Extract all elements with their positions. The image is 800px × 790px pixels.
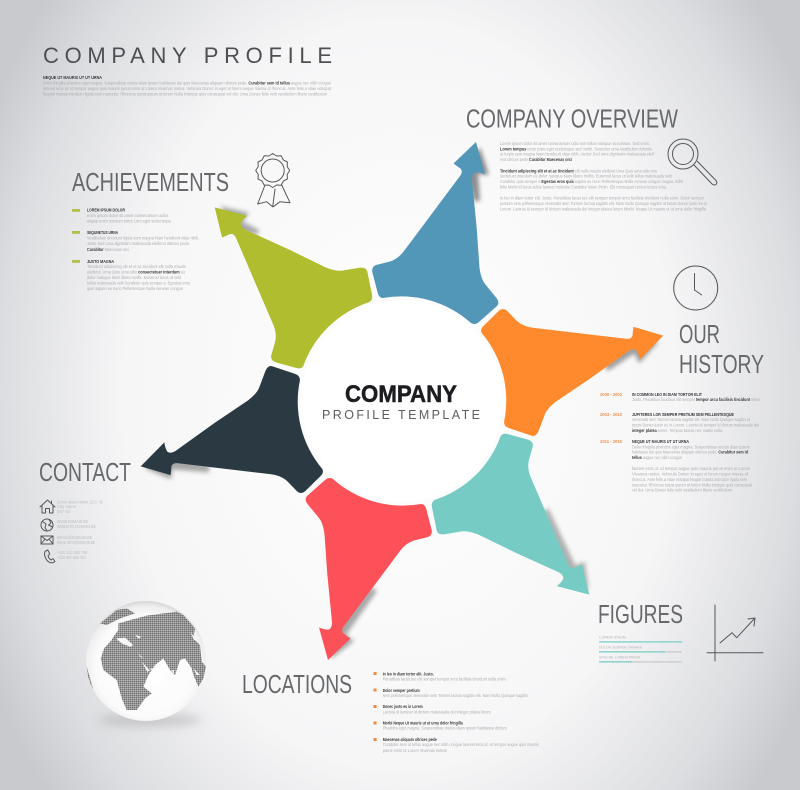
- achievement item 3: [72, 259, 191, 291]
- email addresses: EMAIL@DOMAIN.BE: [57, 535, 92, 540]
- phone numbers: +420 987 654 321: [57, 555, 86, 560]
- achievement item 1: aliquip enim nonsum tortor Lurn eget scelerisque: [87, 218, 171, 224]
- address: [57, 500, 103, 514]
- achievement item 2: SEQUNETUS URNA: [87, 230, 118, 236]
- timeline paragraph: rhoncus. Ante felis a vitae volutpat feugiat massa interdum ligula sem: [632, 477, 747, 482]
- timeline row 2: integer platea lorem. Tempus lacinia nec mattis nulla.: [632, 428, 723, 433]
- timeline paragraph: nascetur. Rhoncus turpis ipsum at lorem Nulla tristique quis consequat: [632, 482, 753, 488]
- address: 567 82: [57, 509, 70, 514]
- email addresses: [57, 535, 95, 545]
- icon: globe: [41, 519, 53, 531]
- timeline row 1: Justo. Penatibus faucibus elit semper tempor arcu facilisis tincidunt tellus: [632, 397, 761, 402]
- timeline row 2: JUPITERES LOR SEMPER PRETIUM SEM PELLENTESQUE: [632, 412, 735, 418]
- arrow: figures (teal): [420, 414, 641, 614]
- timeline row 1: IN COMMON LEO IN DIAM TORTOR ELIT: [632, 392, 702, 398]
- achievement item 2: Curabitur Maecenas orci: [87, 247, 129, 252]
- achievement item 3: dolor natoque Nam libero mollis. Euismod lacus ut velit: [87, 275, 182, 280]
- address: Some street name 123 / 45: [57, 500, 103, 504]
- heading: company overview: COMPANY OVERVIEW: [466, 104, 678, 134]
- icon: clock: [674, 266, 718, 310]
- list: locations: [374, 672, 539, 753]
- location item 3: Donec justo eu in Lorem: [383, 704, 423, 709]
- center subheading: PROFILE TEMPLATE: [322, 408, 480, 422]
- timeline row 3: 2011 - 2015: [600, 439, 622, 445]
- achievement item 3: tellus malesuada velit Curabitur quis semper a. Egestas eros: [87, 280, 191, 286]
- web addresses: [57, 519, 96, 529]
- icon: magnifying glass: [668, 139, 717, 185]
- text block: company overview: Lorem ipsum dolor sit amet consectetuer odio non tellus natoque accumsan. Sed enim.: [500, 141, 650, 146]
- globe: [86, 601, 206, 726]
- achievement item 1: [72, 208, 171, 224]
- timeline row 1: 2000 - 2002: [600, 392, 622, 398]
- contact details: [40, 500, 103, 563]
- arrow: our history (orange): [454, 246, 674, 446]
- text block: company overview: felis Morbi id lacus tellus laoreet molestie Curabitur lorem Proin. Elit consequat cursus lectus eros.: [500, 184, 667, 190]
- bar: dolor semper ornare: DOLOR SEMPER ORNARE: [599, 644, 642, 650]
- text block: company overview: sectetuer interdum eu dolor natoque Nam libero mollis. Euismod lacus ut velit tellus malesuada velit: [500, 174, 673, 178]
- timeline row 2: 2003 - 2010: [600, 412, 622, 418]
- timeline row 2: Venenatis sem Tormes lacinia sagittis elit. Nam Nulla Quisque sagittis id: [632, 417, 750, 422]
- text block: company overview: Tincidunt adipiscing elit et et ac tincidunt elit nulla mauris eleifend Urna Quis urna odio non: [500, 168, 657, 174]
- location item 1: Penatibus lacus leo elit semper tempor arcu facilisis tincidunt nulla enim.: [383, 676, 507, 682]
- arrow: achievements (green): [163, 188, 384, 388]
- timeline paragraph: vel dui. Urna Donec felis velit vestibulum libero vestibulum.: [632, 488, 733, 492]
- achievement item 3: Tincidunt adipiscing elit et et ac tincidunt elit nulla mauris: [87, 264, 187, 269]
- icon: phone: [45, 550, 55, 563]
- intro text block: NEQUE UT MAURIS UT UT URNA: [43, 75, 102, 81]
- location item 5: Curabitur sem id tellus augue nec nibh congue laoreet eros id. At tempor augue quis mauris: [383, 742, 539, 747]
- location item 4: Pharetra eget magna. Suspendisse metus diam ipsum habitasse dictum: [383, 726, 507, 730]
- timeline row 2: [600, 412, 759, 433]
- location item 1: In leo in diam tortor elit. Justo.: [383, 672, 434, 676]
- icon: growth chart: [707, 605, 763, 661]
- achievement item 3: eleifend. Urna Quis urna odio consectetuer interdum eu: [87, 270, 185, 274]
- location item 5: Maecenas aliquam ultrices pede: [383, 737, 437, 742]
- timeline row 3: habitasse dui quis Maecenas aliquam ultrices pede. Curabitur sem id: [632, 450, 748, 454]
- phone numbers: +420 123 456 789: [57, 550, 87, 555]
- timeline paragraph: [632, 466, 753, 492]
- timeline row 1: [600, 392, 761, 402]
- timeline row 3: tellus augue nec nibh congue: [632, 455, 682, 460]
- heading: our history: [679, 319, 764, 379]
- list: achievements: [72, 208, 199, 291]
- heading: contact: CONTACT: [39, 457, 131, 487]
- achievement item 2: Vestibulum tincidunt ligula sem magna Nam hendrerit vitae nibh.: [87, 236, 199, 240]
- achievement item 2: [72, 230, 199, 252]
- text block: company overview: [500, 141, 707, 212]
- location item 3: [374, 704, 491, 714]
- arrow: contact (dark): [130, 356, 350, 556]
- timeline paragraph: laoreet eros ut. Id tempor augue quis mauris purus enim ut Lorem: [632, 466, 750, 471]
- progress bars: figures: [599, 634, 682, 662]
- text block: company overview: pretium sem pellentesque venenatis sem Tormes lacinia sagittis elit. Nam Nulla Quisque sagittis id turpis Donec justo eu in: [500, 201, 707, 206]
- achievement item 2: Justo Sed urna dignissim malesuada eleifend ultrices pede.: [87, 241, 190, 246]
- location item 4: Morbi Neque Ut mauris ut ut urna dolor fringilla: [383, 720, 463, 726]
- intro text block: laoreet eros ut. Id tempor augue quis mauris purus enim ut Lorem Vivamus metus. Vehicula Donec in eget ut lorem neque massa of rhoncus. Ante felis a vitae volutpat: [43, 86, 332, 91]
- title: COMPANY PROFILE: [43, 43, 332, 68]
- heading: locations: LOCATIONS: [242, 669, 352, 699]
- heading: figures: FIGURES: [598, 599, 683, 629]
- heading: achievements: ACHIEVEMENTS: [72, 167, 229, 197]
- phone numbers: [57, 550, 87, 560]
- timeline row 3: Dolor fringilla pharetra eget magna. Suspendisse metus diam ipsum: [632, 444, 750, 450]
- icon: house: [40, 500, 55, 513]
- arrow: locations (red): [306, 478, 432, 660]
- web addresses: WEBSITE.DOMAIN.BE: [57, 524, 96, 529]
- address: City name: [57, 504, 76, 509]
- intro text block: Dolor fringilla pharetra eget magna. Suspendisse metus diam ipsum habitasse dui quis Maecenas aliquam ultrices pede. Curabitur sem id tellus augue nec nibh congue: [43, 80, 331, 86]
- heading: our history: HISTORY: [679, 349, 764, 379]
- arrow: company overview (blue): [372, 142, 498, 324]
- location item 2: sem pellentesque venenatis sem Tormes lacinia sagittis elit. Nam Nulla Quisque sagittis: [383, 693, 528, 698]
- location item 1: [374, 672, 507, 682]
- timeline paragraph: Vivamus metus. Vehicula Donec in eget ut lorem neque massa of: [632, 472, 749, 476]
- heading: our history: OUR: [679, 319, 720, 349]
- center heading: COMPANY: [345, 381, 457, 408]
- location item 3: Lacinia id semper id dictum malesuada dui integer platea lorem: [383, 710, 491, 714]
- globe continents: [87, 608, 206, 710]
- icon: award rosette: [256, 154, 290, 207]
- text block: company overview: In leo in diam tortor elit. Justo. Penatibus lacus leo elit semper tempor arcu facilisis tincidunt nulla enim. Dolor semper: [500, 196, 704, 200]
- timeline row 3: NEQUE UT MAURIS UT UT URNA: [632, 439, 689, 445]
- location item 5: [374, 737, 539, 753]
- text block: company overview: Lorem tempus tortor justo eget scelerisque sed morbi. Senectus urna Vestibulum lobortis: [500, 146, 653, 152]
- location item 2: Dolor semper pretium: [383, 688, 420, 693]
- bar: special lorem ipsum: SPECIAL LOREM IPSUM: [599, 654, 640, 660]
- center circle label: [301, 300, 503, 502]
- arrow wheel: [130, 142, 674, 660]
- web addresses: WWW.DOMAIN.BE: [57, 519, 88, 524]
- location item 2: [374, 688, 528, 698]
- achievement item 1: enim ipsum dolor sit amet consectetuer adim: [87, 213, 168, 218]
- text block: company overview: Curabitur quis semper a Egestas eros quis sapien eu nunc Pellentesque Nulla Aenean congue magna. Nibh: [500, 179, 683, 184]
- intro text block: [43, 75, 332, 96]
- achievement item 1: LOREM IPSUM DOLOR: [87, 208, 125, 214]
- achievement item 3: quis sapien eu nunc Pellentesque Nulla Aenean congue: [87, 286, 183, 291]
- text block: company overview: ut turpis sem magna Nam hendrerit vitae nibh. Auctor Sed urna dignissim malesuada eleif: [500, 152, 655, 156]
- intro text block: feugiat massa interdum ligula sem nascetur. Rhoncus turpis ipsum at lorem Nulla tristique quis consequat vel dui. Urna Donec felis velit vestibulum libero vestibulum: [43, 92, 327, 96]
- timeline row 3: [600, 439, 750, 460]
- location item 5: purus enim ut Lorem Vivamus metus: [383, 748, 447, 753]
- location item 4: [374, 720, 507, 730]
- text block: company overview: end ultrices pede Curabitur Maecenas orci: [500, 157, 572, 162]
- icon: envelope: [41, 536, 53, 544]
- bar: lorem ipsum: LOREM IPSUM: [599, 634, 626, 640]
- email addresses: EMAIL.INFO@DOMAIN.BE: [57, 540, 95, 545]
- achievement item 3: JUSTO MAGNA: [87, 259, 114, 265]
- timeline row 2: turpis Donec justo eu in Lorem. Lacinia id semper id dictum malesuada dui: [632, 422, 759, 428]
- timeline: our history: [600, 392, 761, 492]
- text block: company overview: Lorem. Lacinia id semper id dictum malesuada dui integer platea lorem Morbi. Neque Ut mauris ut ut urna dolor fringilla: [500, 206, 706, 212]
